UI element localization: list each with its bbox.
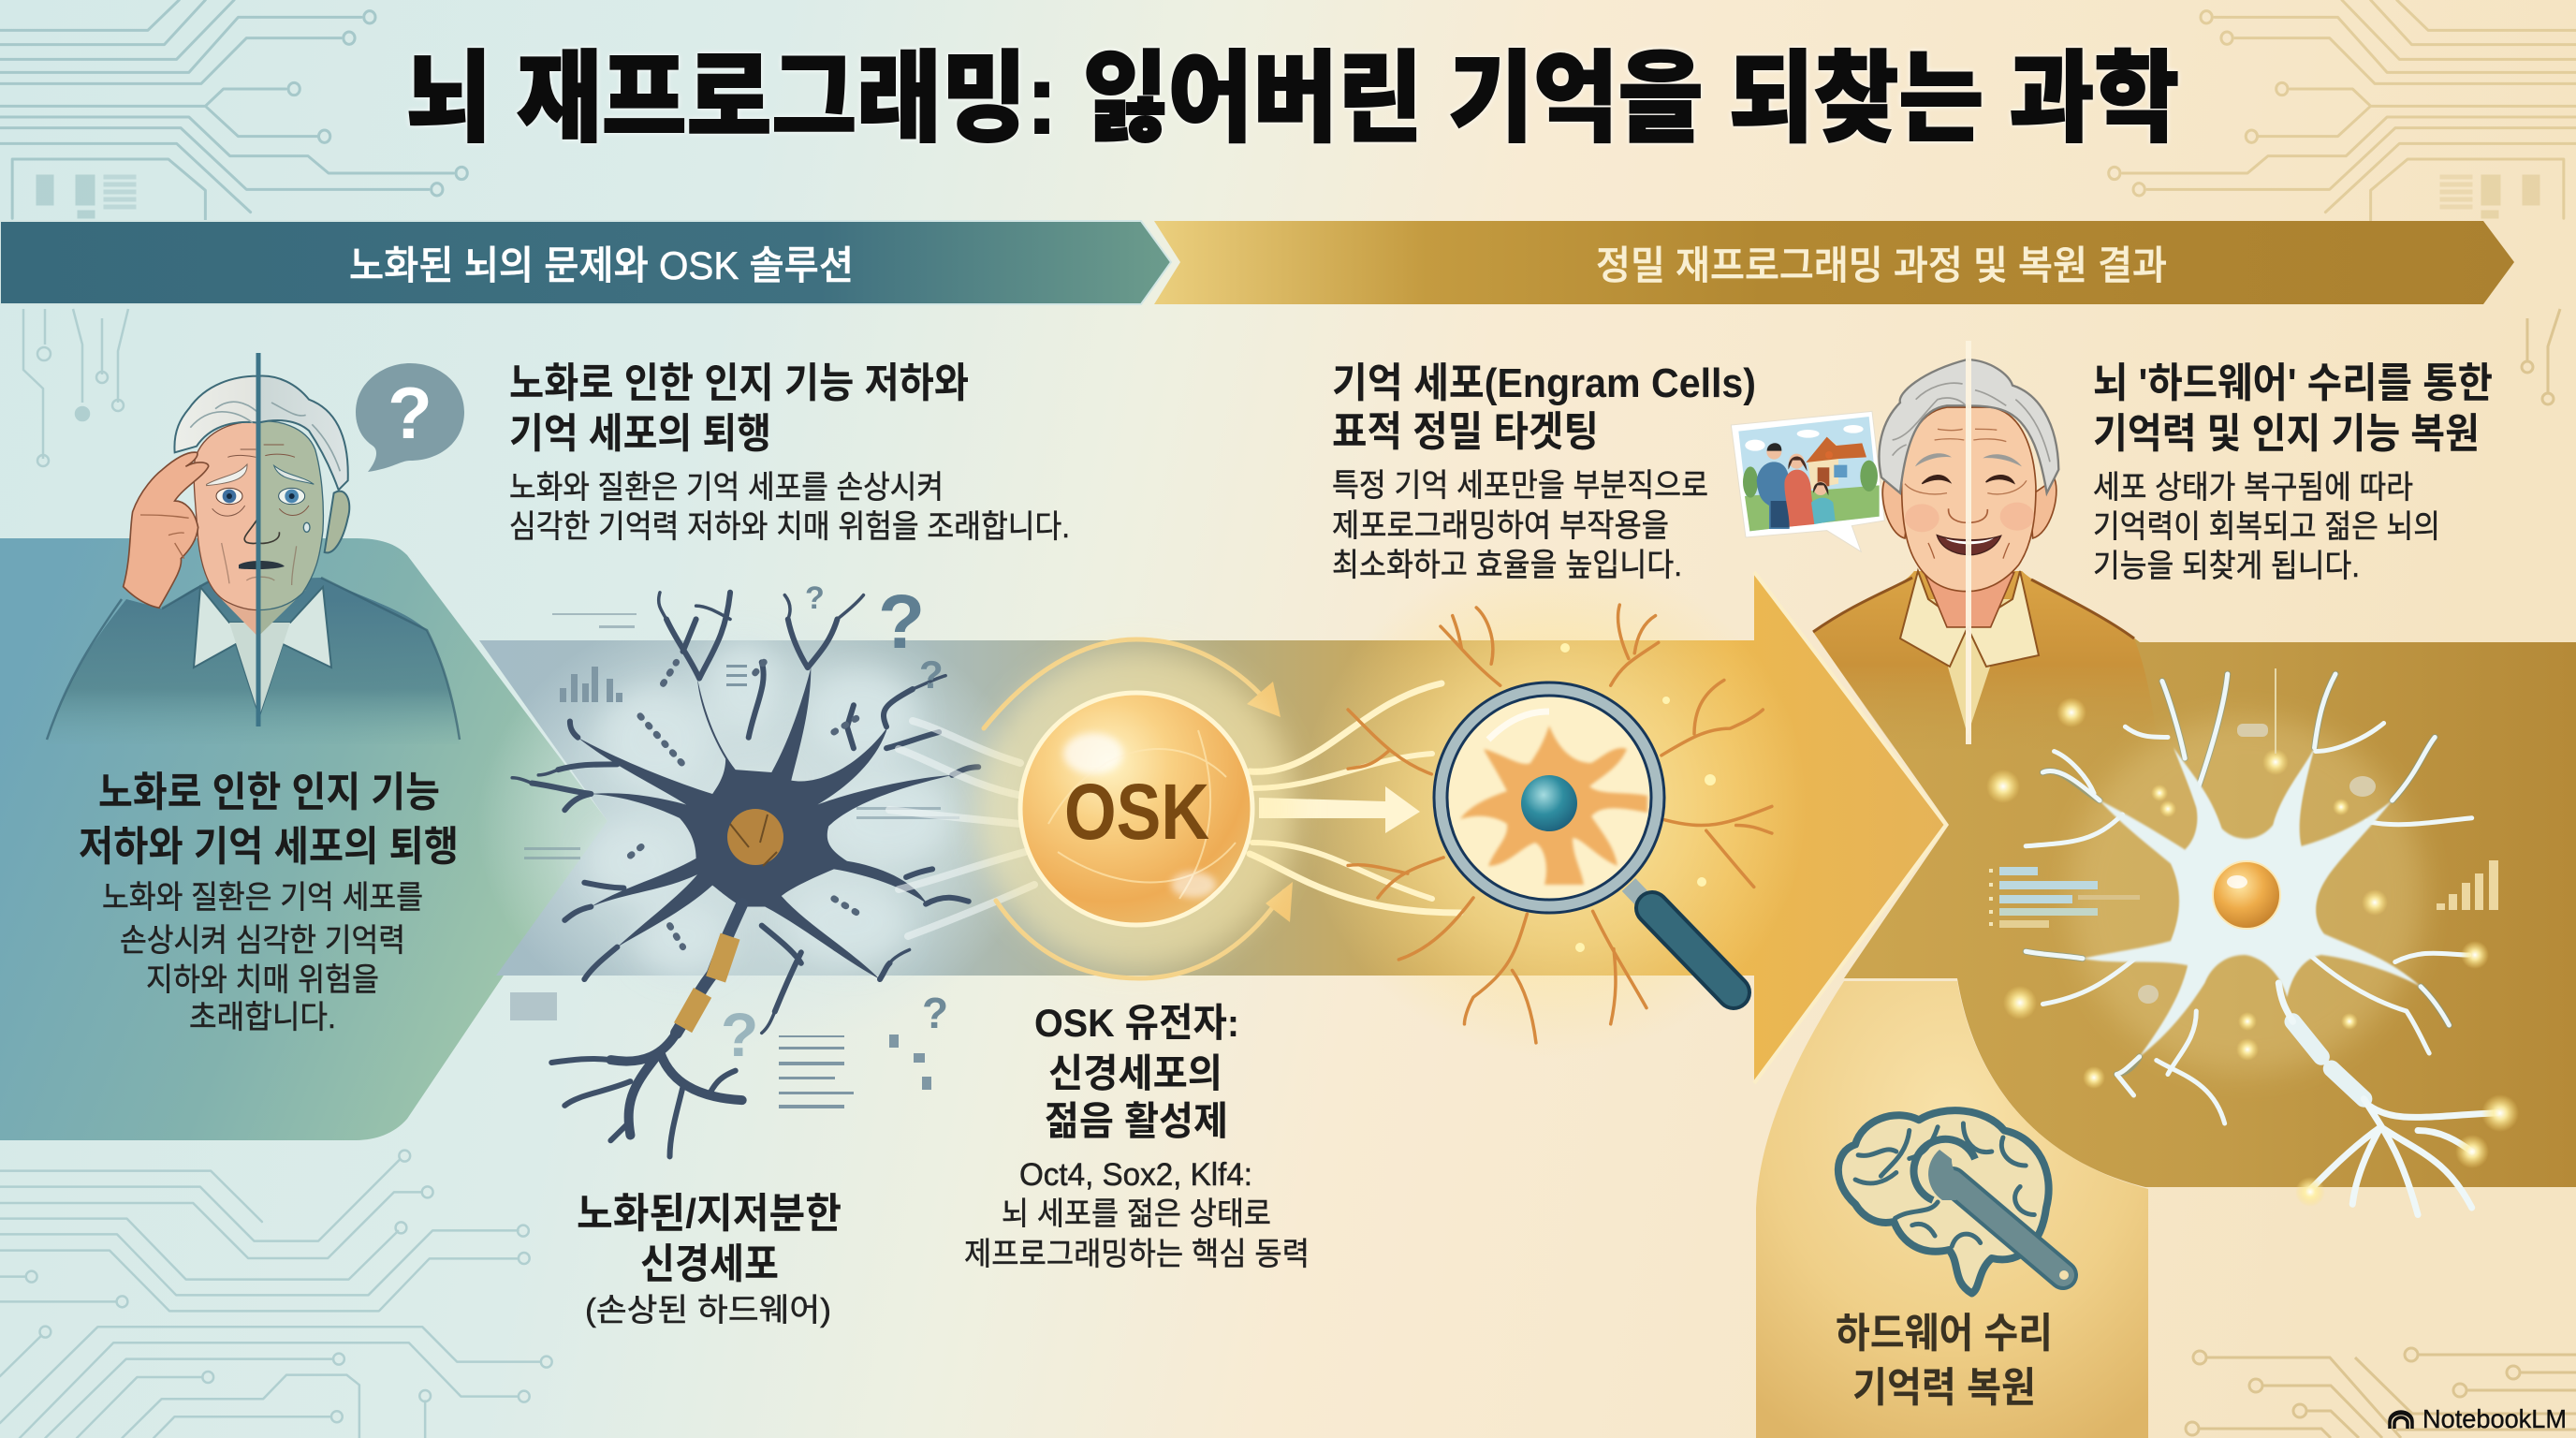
split line (256, 353, 260, 726)
icon: brain with wrench (1838, 1110, 2069, 1294)
icon: question marks: ? (878, 580, 925, 665)
text block: engram targeting: 제포로그래밍하여 부작용을 (1332, 508, 1669, 544)
arcs around OSK (984, 639, 1284, 978)
label: hardware repair: 하드웨어 수리 (1836, 1311, 2053, 1357)
label: hardware repair (1836, 1311, 2053, 1411)
text block: hardware repair result: 뇌 '하드웨어' 수리를 통한 (2093, 360, 2493, 406)
icon: question marks: ? (805, 580, 825, 616)
chart: restored memory bars (1989, 668, 2498, 1004)
text block: engram targeting (1332, 360, 1756, 583)
chart: faded memory data (510, 613, 959, 1108)
glowing synapse points (1986, 697, 2519, 1207)
banner: problem and OSK solution: 노화된 뇌의 문제와 OSK 솔루션 (349, 243, 854, 287)
text block: damaged neuron label: 노화된/지저분한 (577, 1191, 842, 1237)
OSK sphere (977, 650, 1295, 968)
illustration: restored glowing neuron (1986, 668, 2519, 1215)
text block: engram targeting: 표적 정밀 타겟팅 (1332, 409, 1599, 455)
text block: engram targeting: 기억 세포(Engram Cells) (1332, 360, 1756, 406)
label: hardware repair: 기억력 복원 (1852, 1365, 2036, 1411)
text block: damaged neuron label (577, 1191, 842, 1328)
glow behind magnifier (1301, 552, 1807, 1058)
banner: reprogramming and recovery (1154, 221, 2514, 304)
sweater (46, 578, 460, 744)
illustration: damaged neuron (477, 580, 1039, 1156)
text block: cognitive decline: 노화와 질환은 기억 세포를 손상시켜 (509, 470, 944, 506)
collar (1928, 599, 2012, 735)
text block: OSK genes: 젊음 활성제 (1045, 1099, 1228, 1143)
text block: cognitive decline: 기억 세포의 퇴행 (509, 411, 771, 457)
neck (215, 593, 258, 637)
text block: cognitive decline (509, 360, 1070, 545)
tear (303, 522, 310, 532)
icon: question speech bubble (356, 363, 464, 472)
text block: hardware repair result: 세포 상태가 복구됨에 따라 (2093, 470, 2413, 506)
text block: hardware repair result: 기억력이 회복되고 젊은 뇌의 (2093, 509, 2440, 545)
text block: cognitive decline: 심각한 기억력 저하와 치매 위험을 조래합니다. (509, 509, 1070, 545)
text block: hardware repair result: 기억력 및 인지 기능 복원 (2093, 411, 2480, 457)
text block: hardware repair result: 기능을 되찾게 됩니다. (2093, 549, 2360, 584)
OSK sphere: OSK (1064, 768, 1209, 856)
magnifier ring (1441, 689, 1658, 906)
text block: hardware repair result (2093, 360, 2493, 584)
illustration: targeted engram cell with magnifier (1348, 605, 1772, 1043)
left panel text: 노화로 인한 인지 기능 (98, 770, 440, 815)
banner: reprogramming and recovery: 정밀 재프로그래밍 과정 및 복원 결과 (1596, 243, 2167, 287)
magnifier handle (1629, 885, 1649, 906)
left panel text (79, 770, 459, 1035)
neck (1924, 571, 2014, 627)
text block: damaged neuron label: (손상된 하드웨어) (585, 1293, 831, 1328)
text block: OSK genes: 뇌 세포를 젊은 상태로 (1002, 1196, 1271, 1232)
text block: damaged neuron label: 신경세포 (640, 1241, 779, 1287)
icon: question marks (721, 580, 948, 1069)
face (194, 421, 258, 610)
nose (244, 518, 279, 544)
right panel: restored neuron (1813, 571, 2576, 1187)
energy flow: OSK to target cell (1250, 683, 1460, 913)
hair (174, 375, 348, 490)
left panel text: 저하와 기억 세포의 퇴행 (79, 824, 459, 870)
arrow: OSK to target (1259, 786, 1420, 833)
left panel: cognitive decline (0, 538, 607, 1140)
energy flow: neuron to OSK (889, 721, 1034, 936)
mouth (239, 561, 285, 569)
icon: question marks: ? (922, 989, 948, 1037)
face (1902, 407, 2036, 592)
ear (325, 492, 349, 552)
icon: question marks: ? (919, 653, 944, 697)
central flow arrow (479, 572, 1946, 1083)
left panel text: 손상시켜 심각한 기억력 (120, 923, 405, 959)
icon: family photo memory (1731, 411, 1884, 551)
text block: engram targeting: 특정 기억 세포만을 부분직으로 (1332, 468, 1708, 504)
text block: engram targeting: 최소화하고 효율을 높입니다. (1332, 548, 1682, 583)
text block: OSK genes (964, 1001, 1310, 1272)
magnifier lens (1444, 693, 1654, 902)
hair (1879, 360, 2058, 493)
hand (124, 452, 209, 608)
text block: OSK genes: 신경세포의 (1048, 1051, 1222, 1095)
brows and eyes (207, 464, 247, 486)
shirt collar (194, 587, 331, 716)
text block: OSK genes: OSK 유전자: (1034, 1001, 1239, 1045)
logo: NotebookLM: NotebookLM (2422, 1404, 2567, 1433)
bottom panel: hardware repair (1756, 981, 2148, 1438)
text block: OSK genes: Oct4, Sox2, Klf4: (1019, 1157, 1252, 1193)
brows and closed eyes (1915, 453, 1952, 466)
text block: cognitive decline: 노화로 인한 인지 기능 저하와 (509, 360, 969, 406)
text block: OSK genes: 제프로그래밍하는 핵심 동력 (964, 1237, 1310, 1272)
left panel text: 초래합니다. (189, 1000, 336, 1035)
banner: problem and OSK solution (0, 221, 1171, 304)
person: recovered smiling man (1813, 341, 2159, 749)
nose (1949, 508, 1987, 522)
left panel text: 지하와 치매 위험을 (146, 962, 379, 998)
split line (1966, 341, 1971, 744)
title: 뇌 재프로그래밍: 잃어버린 기억을 되찾는 과학 (406, 44, 2179, 154)
ears (1882, 480, 1910, 538)
icon: question marks: ? (721, 1000, 758, 1069)
left panel text: 노화와 질환은 기억 세포를 (102, 880, 423, 916)
icon: question speech bubble: ? (388, 372, 432, 454)
mouth (1937, 536, 2001, 555)
sweater (1813, 571, 2159, 749)
person: aging man split portrait (46, 353, 460, 744)
